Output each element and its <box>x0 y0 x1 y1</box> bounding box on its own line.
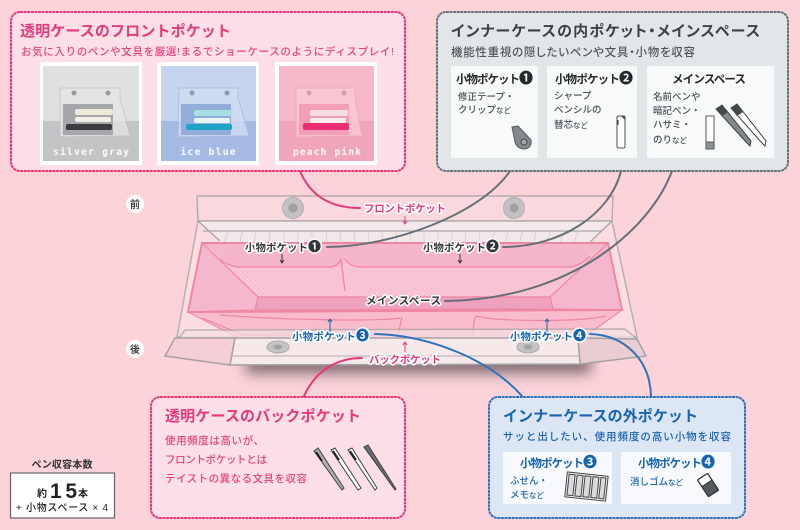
card: small pocket 3: ふせん・ <box>510 476 548 487</box>
case labels: バックポケット <box>369 354 441 366</box>
pen capacity box <box>10 458 114 518</box>
photo: peach pink: peach pink <box>293 147 361 158</box>
photo: ice blue: ice blue <box>180 147 236 158</box>
card: main space: 名前ペンや <box>653 91 701 103</box>
description: front pocket: お気に入りのペンや文具を厳選!まるでショーケースのようにディスプレイ! <box>21 45 394 58</box>
card: small pocket 2: ペンシルの <box>554 105 602 116</box>
card: small pocket 4: 小物ポケット❹ <box>638 454 715 470</box>
card: small pocket 3 <box>503 452 612 504</box>
description: outer pocket: サッと出したい、使用頻度の高い小物を収容 <box>503 430 732 443</box>
card: small pocket 4: 消しゴムなど <box>630 476 684 488</box>
card: small pocket 4 <box>621 452 731 504</box>
card: main space <box>647 66 774 158</box>
card: small pocket 2 <box>547 66 637 158</box>
card: main space: 暗記ペン・ <box>653 106 701 117</box>
panel: inner case outer pocket <box>489 397 745 518</box>
marker: back: 後 <box>130 343 140 356</box>
marker: front <box>126 195 144 213</box>
photo: peach pink <box>275 62 377 165</box>
heading: front pocket: 透明ケースのフロントポケット <box>20 23 231 40</box>
card: small pocket 3: 小物ポケット❸ <box>520 454 597 470</box>
pen capacity box: 15 <box>50 480 77 503</box>
case labels: 小物ポケット❹ <box>510 328 586 343</box>
card: main space: メインスペース <box>672 73 746 86</box>
description: back pocket <box>165 434 308 485</box>
heading: inner pocket: インナーケースの内ポケット・メインスペース <box>451 23 760 40</box>
marker: front: 前 <box>130 198 140 211</box>
icon: eraser <box>698 473 718 497</box>
card: small pocket 2: シャープ <box>554 91 592 102</box>
card: main space: のりなど <box>653 135 688 146</box>
marker: back <box>126 340 144 358</box>
card: small pocket 2: 小物ポケット❷ <box>555 70 633 86</box>
card: main space: ハサミ・ <box>653 120 691 131</box>
card: small pocket 3: メモなど <box>510 490 545 501</box>
panel: front pocket <box>11 12 405 171</box>
pen capacity box: ペン収容本数 <box>32 458 92 471</box>
case shadow <box>246 355 591 373</box>
panel: inner pocket and main space <box>437 12 788 171</box>
icon: four pens <box>314 445 396 490</box>
small arrows <box>280 216 549 352</box>
case labels: 小物ポケット❶ <box>245 239 321 254</box>
photo: ice blue <box>157 62 259 165</box>
icon: pens and glue <box>706 104 766 149</box>
description: back pocket: 使用頻度は高いが、 <box>165 434 264 447</box>
card: small pocket 1 <box>451 66 538 158</box>
case labels: フロントポケット <box>364 203 446 215</box>
heading: back pocket: 透明ケースのバックポケット <box>165 408 361 425</box>
icon: sticky notes <box>565 472 608 501</box>
description: inner pocket: 機能性重視の隠したいペンや文具・小物を収容 <box>451 45 696 59</box>
card: small pocket 2: 替芯など <box>554 119 589 131</box>
pen capacity box: 本 <box>78 487 88 500</box>
icon: lead case <box>617 116 625 148</box>
panel: back pocket <box>151 397 405 518</box>
case labels: メインスペース <box>366 295 441 307</box>
icon: correction tape <box>512 126 531 149</box>
pen capacity box: 約 <box>37 487 47 500</box>
photo: silver gray: silver gray <box>53 147 129 158</box>
connector curves <box>300 171 672 396</box>
card: small pocket 1: クリップなど <box>458 105 512 116</box>
pencase illustration <box>165 196 646 365</box>
pen capacity box: + 小物スペース × 4 <box>16 501 108 514</box>
description: back pocket: フロントポケットとは <box>165 454 268 466</box>
heading: outer pocket: インナーケースの外ポケット <box>503 407 698 425</box>
case labels <box>245 203 586 366</box>
card: small pocket 1: 小物ポケット❶ <box>456 70 533 86</box>
photo: silver gray <box>40 62 142 165</box>
case labels: 小物ポケット❷ <box>423 239 499 254</box>
card: small pocket 1: 修正テープ・ <box>458 91 514 103</box>
case labels: 小物ポケット❸ <box>292 328 369 343</box>
description: back pocket: テイストの異なる文具を収容 <box>165 472 308 485</box>
